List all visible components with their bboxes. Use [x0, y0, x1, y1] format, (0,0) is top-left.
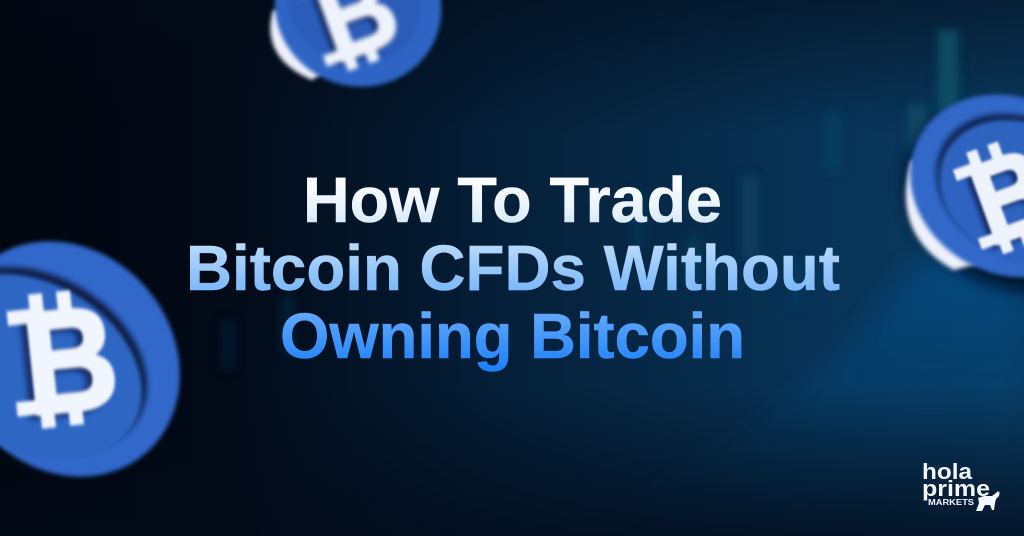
highlight: white coin edge: [906, 160, 990, 270]
title line 2: Bitcoin CFDs Without: [186, 232, 840, 304]
logo word: markets: MARKETS: [928, 498, 975, 507]
coin: top, partly cropped: [248, 0, 468, 114]
logo: hola prime markets: [922, 459, 1000, 511]
icon: bull: [976, 491, 1000, 511]
logo word: hola: hola: [922, 459, 973, 484]
coin: right, partly cropped: [875, 60, 1024, 325]
logo word: prime: prime: [922, 476, 990, 501]
icon: bitcoin symbol, left coin: B: [16, 274, 125, 445]
title line 3: Owning Bitcoin: [280, 300, 745, 372]
title line 1: How To Trade: [303, 164, 722, 236]
faint candlestick chart: [222, 30, 958, 370]
coin: left, large: [0, 195, 227, 523]
icon: bitcoin symbol, left coin: B: [10, 278, 119, 449]
title: [186, 164, 840, 372]
highlight: white coin edge: [270, 10, 340, 80]
